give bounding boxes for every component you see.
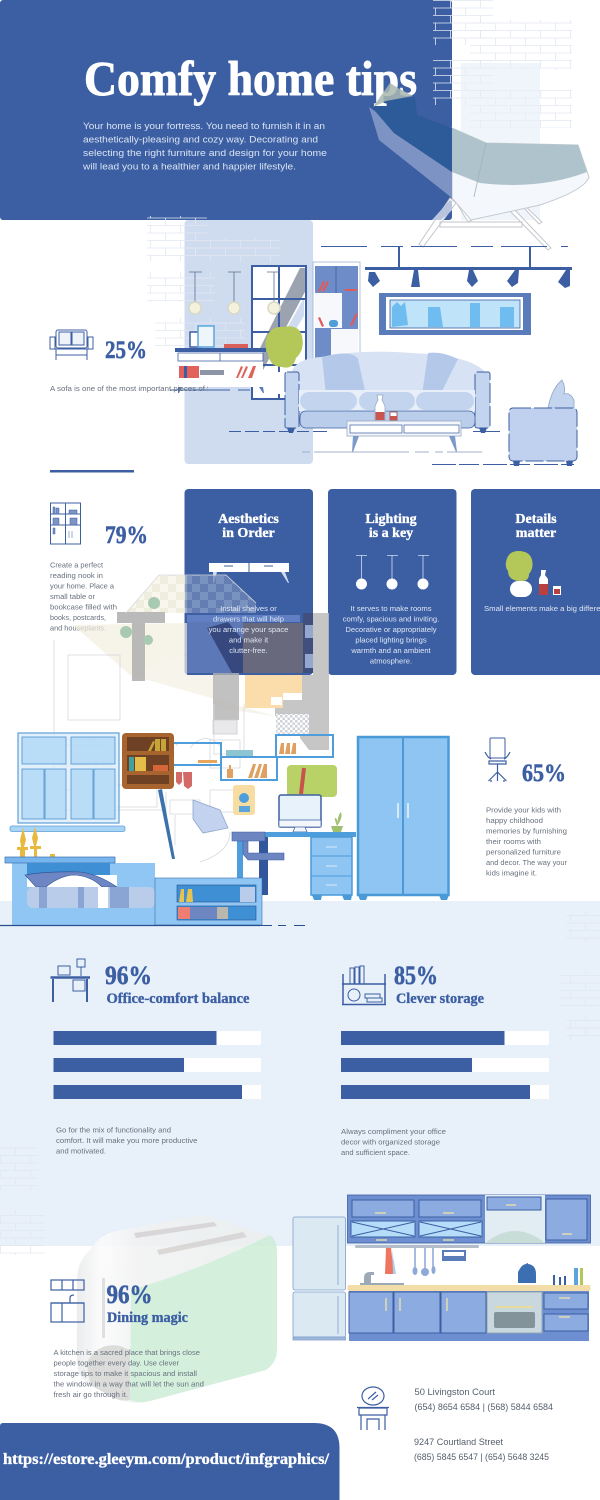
- upper cabinets: [348, 1195, 590, 1243]
- plant and decanter: [506, 551, 561, 597]
- fridge: [293, 1217, 346, 1340]
- checker floor: [126, 575, 187, 613]
- pale panel behind chair: [461, 63, 540, 220]
- kids text: their rooms with: [486, 837, 541, 846]
- stat: bookcase: [50, 503, 148, 632]
- wall shelves: [174, 735, 333, 780]
- address block 2: [414, 1437, 549, 1462]
- heading: Office-comfort balance: [106, 991, 250, 1007]
- number: 96%: 96%: [106, 1280, 152, 1309]
- panel: office comfort: [50, 959, 261, 1156]
- card heading: [515, 512, 557, 541]
- kids text: memories by furnishing: [486, 826, 567, 836]
- window: [252, 266, 306, 399]
- address block 1: (654) 8654 6584 | (568) 5844 6584: [414, 1402, 553, 1412]
- heading: Clever storage: [396, 991, 484, 1007]
- chair headrest: [373, 83, 413, 107]
- reading nook text: and houseplants.: [50, 624, 106, 632]
- kitchen text: [54, 1348, 204, 1399]
- pendant lamps: [356, 555, 429, 590]
- storage text: and sufficient space.: [341, 1148, 410, 1157]
- side armchair: [509, 380, 577, 466]
- kitchen text: A kitchen is a sacred place that brings close: [54, 1348, 200, 1357]
- number: 25%: 25%: [105, 337, 147, 364]
- install text over plan: [209, 604, 288, 655]
- kitchen text: people together every day. Use clever: [54, 1358, 179, 1368]
- lighting text: atmosphere.: [370, 656, 412, 666]
- reading nook text: Create a perfect: [50, 560, 104, 570]
- card heading: in Order: [222, 526, 275, 541]
- address block 1: 50 Livingston Court: [414, 1387, 496, 1397]
- kids text: [486, 806, 567, 878]
- number: 85%: 85%: [394, 961, 438, 990]
- wardrobe: [358, 737, 449, 900]
- office text: comfort. It will make you more productive: [56, 1136, 198, 1145]
- lighting text: warmth and an ambient: [350, 646, 432, 655]
- icon: vanity: [357, 1387, 389, 1430]
- lighting text: placed lighting brings: [355, 636, 427, 644]
- panel: clever storage: [341, 961, 549, 1157]
- plant: [265, 326, 303, 394]
- utensil rail: [355, 1245, 583, 1285]
- number: 96%: 96%: [105, 961, 152, 990]
- lighting text: Decorative or appropriately: [345, 625, 437, 634]
- reading nook text: [50, 560, 117, 632]
- hanging lamps: [189, 272, 280, 314]
- floor lines: [170, 390, 574, 464]
- kids text: and decor. The way your: [486, 858, 567, 867]
- living room illustration: [170, 246, 577, 466]
- icon: shelf: [342, 966, 386, 1004]
- address block 2: (685) 5845 6547 | (654) 5648 3245: [414, 1452, 549, 1462]
- city picture: [379, 293, 531, 335]
- lighting text: It serves to make rooms: [350, 604, 432, 613]
- address block 1: [414, 1387, 553, 1412]
- footer url panel: [0, 1423, 340, 1500]
- install text over plan: Install shelves or: [220, 604, 277, 613]
- trophies: [17, 827, 55, 859]
- storage text: decor with organized storage: [341, 1138, 440, 1146]
- header panel: [0, 0, 452, 220]
- stat: kids chair: [485, 738, 567, 878]
- card heading: Details: [515, 512, 557, 527]
- number: 65%: 65%: [522, 760, 566, 787]
- kitchen text: storage tips to make it spacious and install: [54, 1369, 197, 1378]
- brick wall right side: [559, 912, 600, 1040]
- card: aesthetics: [184, 489, 313, 675]
- kids room illustration: [0, 733, 449, 926]
- office text: and motivated.: [56, 1146, 106, 1156]
- icon: office chair: [485, 738, 510, 781]
- intro paragraph: aesthetically-pleasing and cozy way. Decorating and: [83, 134, 318, 146]
- desk with computer: [232, 795, 356, 900]
- card heading: is a key: [369, 526, 413, 541]
- brick wall top right: [433, 0, 572, 128]
- reading nook text: books, postcards,: [50, 613, 106, 622]
- icon: bookcase: [50, 503, 81, 544]
- title: Comfy home tips: [84, 51, 417, 106]
- bed: [0, 789, 305, 926]
- track light: [321, 246, 572, 288]
- card heading: matter: [516, 526, 556, 541]
- office text: Go for the mix of functionality and: [56, 1126, 171, 1134]
- office text: [56, 1126, 198, 1156]
- kitchen text: fresh air go through it.: [54, 1390, 128, 1399]
- armchair illustration: [369, 97, 589, 250]
- wooden shelf: [122, 733, 174, 789]
- lighting text: [343, 604, 439, 666]
- heading: Dining magic: [107, 1310, 188, 1326]
- kids text: Provide your kids with: [486, 806, 561, 814]
- intro paragraph: will lead you to a healthier and happier lifestyle.: [82, 162, 296, 172]
- brick wall left side: [0, 1146, 45, 1255]
- reading nook text: your home. Place a: [50, 582, 115, 590]
- url: https://estore.gleeym.com/product/infgraphics/: [3, 1451, 330, 1468]
- intro paragraph: Your home is your fortress. You need to furnish it in an: [83, 121, 325, 132]
- brick wall living room: [147, 216, 280, 348]
- reading nook text: small table or: [50, 592, 95, 601]
- icon: desk: [50, 959, 90, 1002]
- pictures and keepsakes: [176, 765, 337, 833]
- storage text: [341, 1127, 446, 1157]
- light section background: [0, 901, 600, 1246]
- left pale blue panel: [184, 220, 313, 464]
- icon: sofa: [50, 330, 93, 360]
- reading nook text: reading nook in: [50, 571, 103, 580]
- stat: dining: [51, 1280, 204, 1399]
- kitchen illustration: [293, 1195, 590, 1341]
- install text over plan: drawers that will help: [213, 614, 284, 624]
- intro paragraph: [82, 121, 327, 172]
- sofa: [285, 352, 490, 433]
- icon: kitchen: [51, 1280, 84, 1322]
- storage text: Always compliment your office: [341, 1127, 446, 1136]
- card heading: Lighting: [365, 512, 417, 527]
- address block 2: 9247 Courtland Street: [414, 1437, 504, 1447]
- card heading: Aesthetics: [218, 512, 279, 527]
- reading nook text: bookcase filled with: [50, 602, 117, 612]
- counter and lower cabinets: [348, 1285, 590, 1341]
- install text over plan: you arrange your space: [209, 625, 288, 634]
- console with frames: [175, 326, 266, 393]
- kids text: personalized furniture: [486, 848, 561, 856]
- card heading: [365, 512, 417, 541]
- card: lighting: [328, 489, 456, 675]
- stat: sofa: [50, 330, 208, 392]
- card heading: [218, 512, 279, 541]
- install text over plan: and make it: [229, 636, 269, 644]
- kids text: kids imagine it.: [486, 868, 537, 878]
- install text over plan: clutter-free.: [229, 646, 268, 655]
- bar chart right: [341, 1031, 549, 1099]
- console icon: [209, 563, 289, 583]
- lighting text: comfy, spacious and inviting.: [343, 614, 439, 624]
- bookshelf: [313, 262, 360, 362]
- sofa caption: A sofa is one of the most important pieces of furniture: [50, 384, 236, 393]
- contacts: [357, 1387, 553, 1462]
- checker floor on card: [185, 575, 256, 613]
- coffee table with decanter: [347, 395, 461, 452]
- toaster image: [77, 1215, 277, 1403]
- divider rule: [50, 470, 134, 472]
- bar chart left: [54, 1031, 261, 1099]
- card: details: [471, 489, 600, 675]
- intro paragraph: selecting the right furniture and design for your home: [83, 148, 327, 159]
- kids text: happy childhood: [486, 816, 543, 825]
- floor plan overlay: [54, 575, 329, 862]
- window: [10, 733, 125, 832]
- kitchen text: the window in a way that will let the sun and: [54, 1380, 204, 1388]
- number: 79%: 79%: [105, 522, 148, 549]
